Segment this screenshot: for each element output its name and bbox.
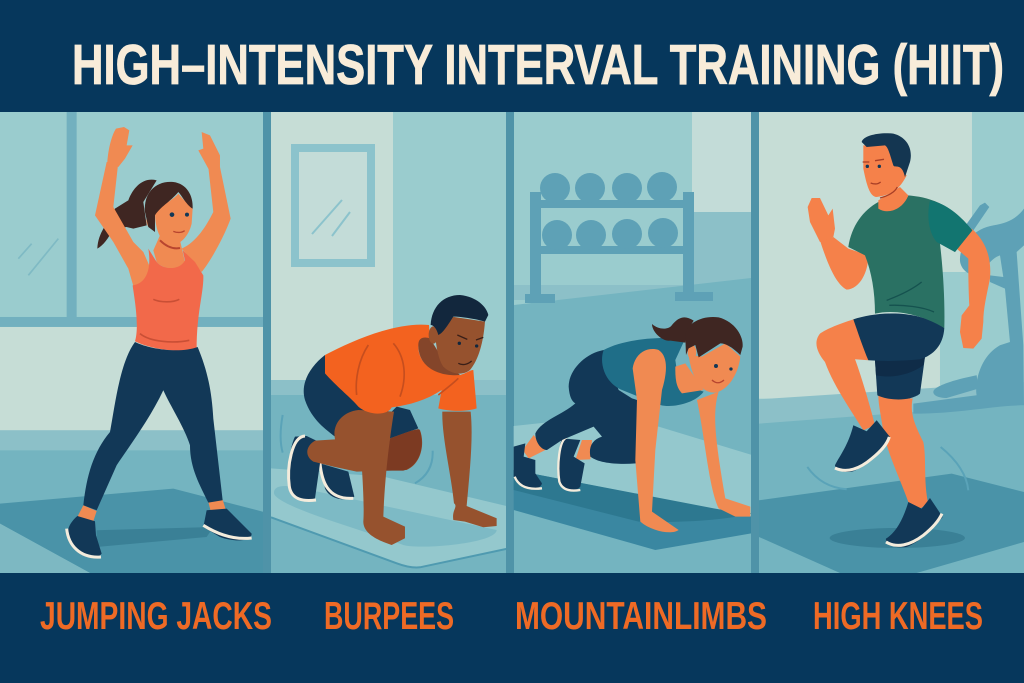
raised hand [808, 198, 835, 242]
face [155, 194, 193, 245]
standing leg [878, 395, 928, 509]
ankles [523, 435, 545, 458]
divider [506, 112, 514, 573]
left arm [358, 410, 405, 545]
tank top [133, 249, 203, 351]
head [863, 145, 907, 197]
leggings [83, 342, 223, 510]
mirror [291, 144, 375, 267]
ponytail [652, 317, 694, 343]
right hand [198, 132, 220, 169]
t-shirt [848, 195, 972, 328]
shoes [514, 443, 542, 489]
hair [685, 317, 743, 357]
lower shorts [875, 357, 925, 399]
near arm [633, 349, 679, 532]
figure: woman doing mountain climbers [514, 317, 750, 532]
right arm [182, 167, 231, 272]
back shoe [320, 463, 354, 499]
shoe standing [886, 498, 943, 547]
floor band [514, 423, 752, 520]
shorts [304, 355, 418, 438]
front arm [820, 237, 868, 290]
figure: woman doing jumping jacks [67, 127, 252, 557]
right arm [442, 412, 497, 527]
head [689, 343, 740, 393]
divider [751, 112, 759, 573]
divider [263, 112, 271, 573]
ponytail [97, 180, 157, 249]
figure: man doing burpee [289, 295, 497, 545]
hair [145, 182, 193, 232]
back arm [957, 229, 990, 349]
exercise mat [514, 470, 752, 550]
ankles [77, 505, 97, 521]
upper shorts [853, 314, 944, 361]
left arm [95, 162, 151, 286]
dumbbell rack [525, 172, 713, 303]
panel: burpees [271, 112, 509, 573]
neck [675, 363, 704, 393]
label: burpees: BURPEES [324, 595, 454, 638]
hair [431, 295, 488, 335]
left shoe [68, 516, 102, 557]
label: jumping jacks: JUMPING JACKS [40, 595, 272, 638]
thigh and shin [307, 410, 422, 472]
exercise mat [759, 474, 1024, 573]
head [435, 317, 485, 374]
exercise machine [913, 203, 1024, 414]
exercise mat [271, 468, 509, 567]
raised leg [816, 319, 875, 430]
t-shirt [325, 325, 477, 414]
neck [153, 235, 185, 268]
top [602, 338, 704, 406]
front shoe [289, 436, 320, 501]
left hand [107, 127, 133, 167]
shoe raised [835, 420, 890, 472]
panel: jumping jacks [0, 112, 264, 573]
right shoe [203, 509, 252, 540]
panel: high knees [759, 112, 1024, 573]
neck [418, 337, 460, 375]
neck [878, 187, 908, 211]
far arm [697, 392, 750, 517]
panel: mountain climbers [514, 112, 752, 573]
hair [862, 133, 911, 177]
label: mountain climbers: MOUNTAINLIMBS [515, 595, 767, 638]
leggings [535, 350, 637, 464]
figure: man doing high knees [808, 133, 990, 547]
